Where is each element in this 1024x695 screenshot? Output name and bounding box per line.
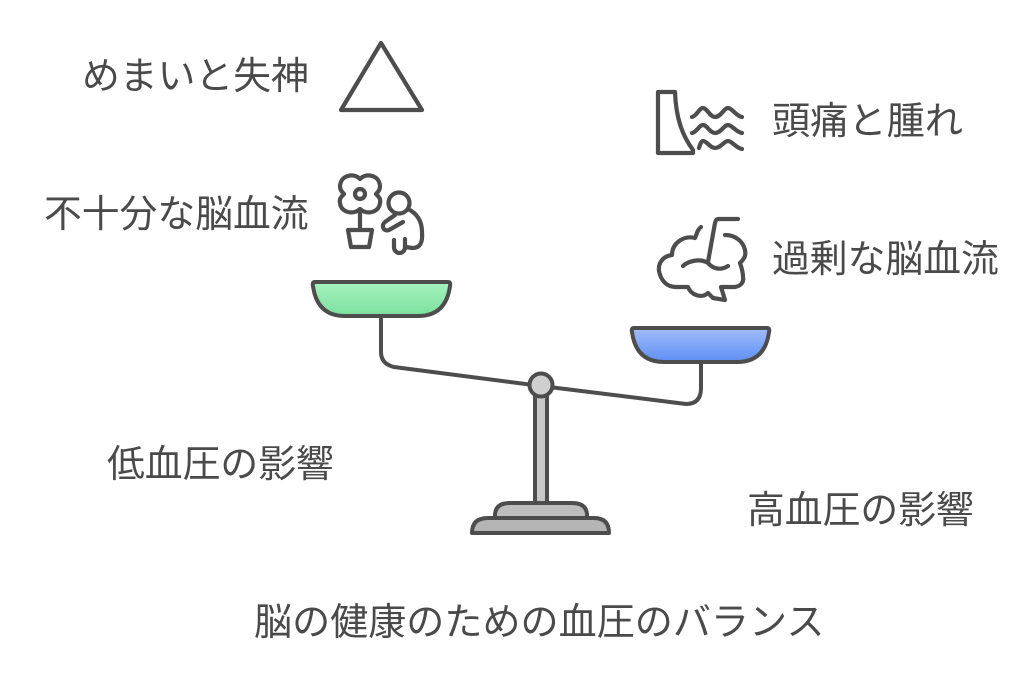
pivot xyxy=(530,374,552,396)
blue pan xyxy=(632,328,769,362)
title: 脳の健康のための血圧のバランス xyxy=(254,602,824,644)
base upper xyxy=(495,503,587,518)
green pan xyxy=(313,282,450,316)
icon: brain xyxy=(659,219,745,300)
icon: dam and water xyxy=(658,92,742,153)
left pan arm xyxy=(381,316,701,404)
base lower xyxy=(472,518,609,533)
label: headache and swelling: 頭痛と腫れ xyxy=(772,100,963,143)
label: excessive cerebral blood flow: 過剰な脳血流 xyxy=(772,239,999,281)
label: effects of high blood pressure: 高血圧の影響 xyxy=(747,490,974,532)
pillar xyxy=(535,393,547,503)
scale xyxy=(313,282,769,533)
icon: triangle xyxy=(341,43,422,110)
label: dizziness and fainting: めまいと失神 xyxy=(82,56,309,98)
label: insufficient cerebral blood flow: 不十分な脳血流 xyxy=(44,194,309,236)
icon: flower pot and person xyxy=(340,175,422,253)
label: effects of low blood pressure: 低血圧の影響 xyxy=(107,444,334,486)
